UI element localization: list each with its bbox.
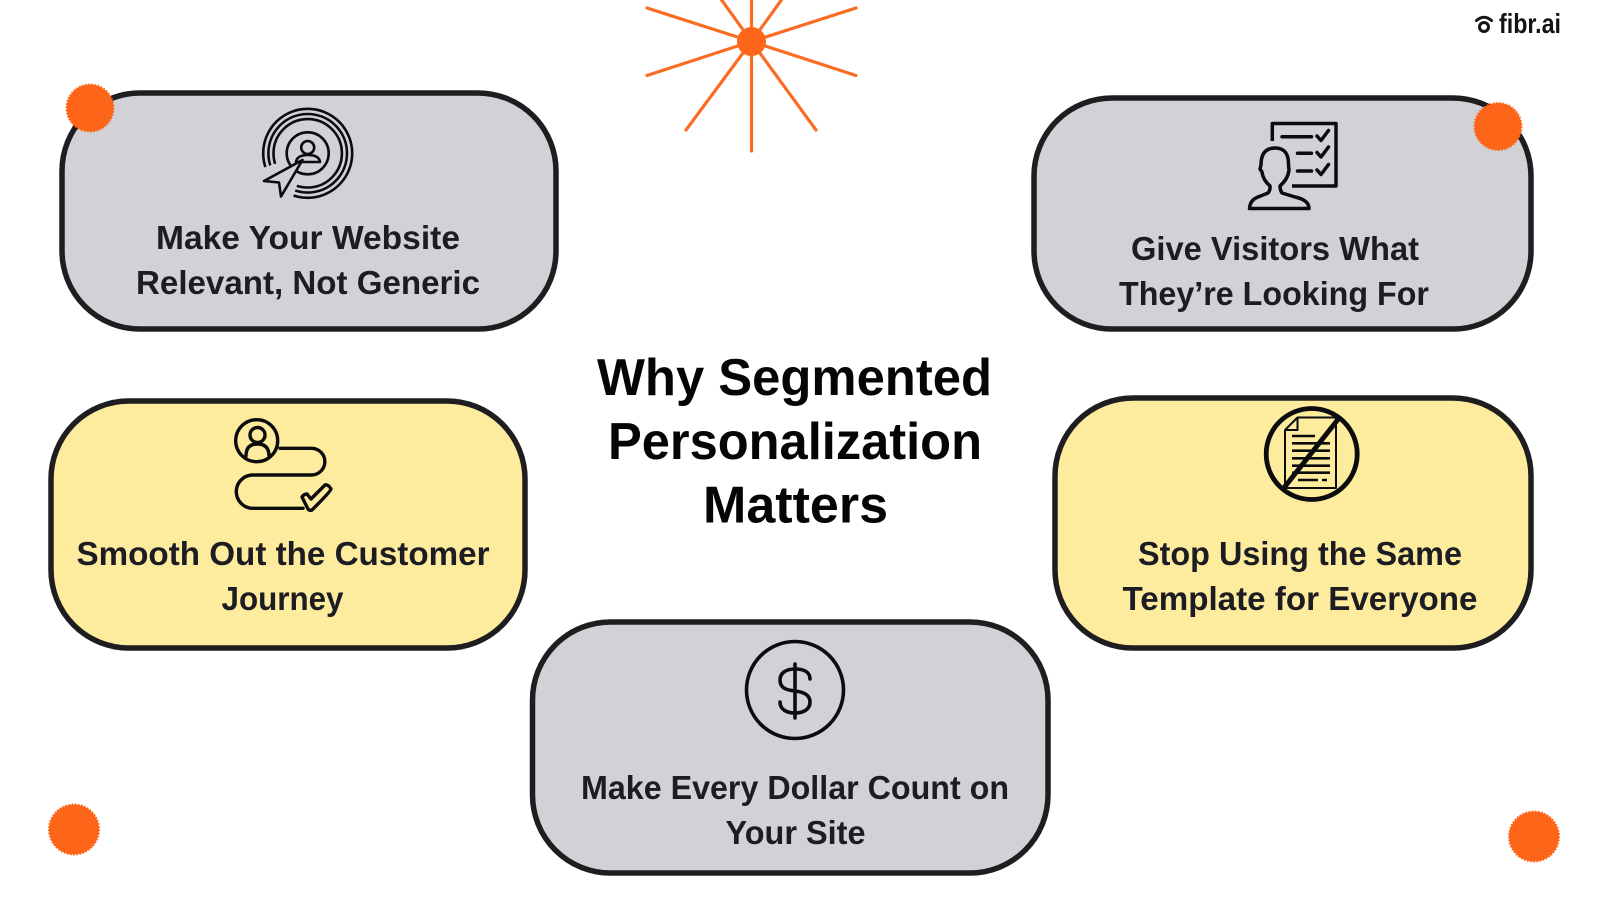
card background [51, 401, 525, 648]
card label [76, 535, 490, 617]
card background [532, 622, 1048, 873]
card label [1119, 230, 1429, 312]
icon: target with cursor [250, 109, 352, 212]
card label [581, 769, 1009, 851]
title: Matters [703, 476, 888, 534]
panel: smooth out the customer journey [51, 401, 525, 648]
card label [1122, 535, 1478, 617]
orange dot top left [66, 84, 114, 132]
icon: person with checklist [1250, 124, 1336, 208]
brand logo [1476, 8, 1561, 39]
card background [62, 93, 556, 329]
starburst decoration [647, 0, 856, 151]
icon: dollar coin [746, 642, 844, 738]
icon: journey path [236, 420, 331, 510]
icon: crossed-out document [1266, 408, 1357, 500]
card background [1055, 398, 1531, 648]
card label: Journey [222, 580, 344, 617]
card label: Relevant, Not Generic [136, 264, 480, 301]
card label: Stop Using the Same [1138, 535, 1462, 572]
panel: give visitors what they're looking for [1034, 98, 1531, 329]
orange dot bottom left [49, 804, 99, 854]
title: Personalization [608, 413, 982, 471]
panel: stop using the same template [1055, 398, 1531, 648]
title: Why Segmented [597, 349, 992, 407]
orange dot bottom right [1509, 812, 1559, 862]
card background [1034, 98, 1531, 329]
panel: make your website relevant [62, 93, 556, 329]
panel: make every dollar count [532, 622, 1048, 873]
card label [136, 219, 480, 301]
orange dot top right [1474, 103, 1522, 150]
logo icon [1476, 17, 1492, 32]
card label: Give Visitors What [1131, 230, 1419, 267]
card label: Your Site [726, 814, 866, 851]
card label: Smooth Out the Customer [76, 535, 490, 572]
title [597, 349, 992, 534]
card label: They’re Looking For [1119, 275, 1429, 312]
card label: Make Every Dollar Count on [581, 769, 1009, 806]
card label: Make Your Website [156, 219, 460, 256]
card label: Template for Everyone [1122, 580, 1478, 617]
logo wordmark: fibr.ai [1499, 8, 1561, 39]
